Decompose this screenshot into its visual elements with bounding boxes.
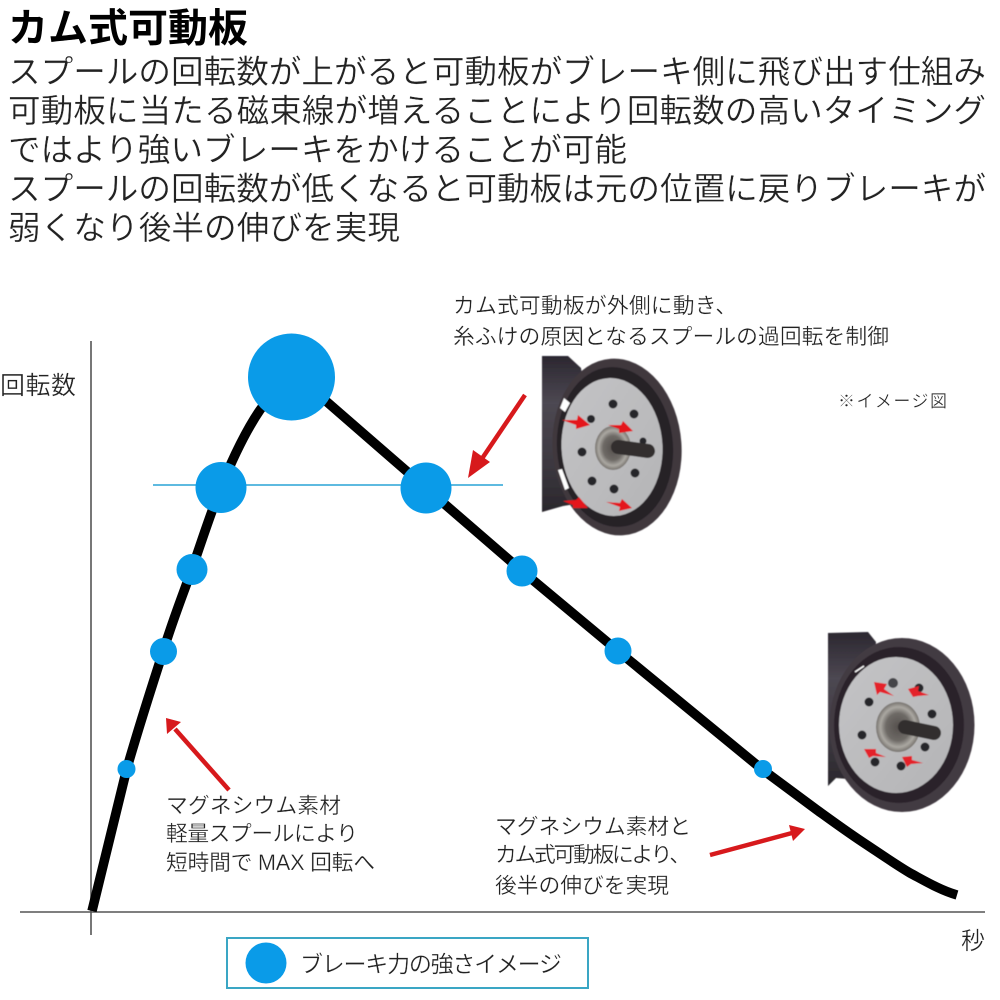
annotation: magnesium spool: 軽量スプールにより [166, 821, 358, 846]
spool photo: plate returned [828, 632, 974, 812]
annotation: magnesium and cam plate: カム式可動板により、 [495, 842, 691, 867]
x axis label: 秒 [961, 928, 985, 955]
threshold line [153, 484, 503, 486]
description text: 可動板に当たる磁束線が増えることにより回転数の高いタイミング [8, 92, 986, 129]
description text: スプールの回転数が上がると可動板がブレーキ側に飛び出す仕組み [8, 53, 986, 90]
y axis label: 回転数 [0, 372, 76, 400]
legend circle [246, 942, 286, 984]
chart axes [20, 341, 985, 935]
annotation: magnesium spool: 短時間で MAX 回転へ [166, 850, 375, 875]
brake strength circles [118, 334, 772, 778]
annotation: magnesium and cam plate [495, 814, 691, 898]
description text: ではより強いブレーキをかけることが可能 [8, 131, 627, 168]
legend label: ブレーキ力の強さイメージ [300, 951, 562, 977]
arrow: to spool image [468, 395, 525, 478]
description text [8, 53, 986, 246]
annotation: cam plate moves outward [453, 293, 889, 349]
annotation: magnesium spool [166, 793, 375, 875]
description text: 弱くなり後半の伸びを実現 [8, 209, 400, 246]
annotation: cam plate moves outward: 糸ふけの原因となるスプールの過回転を制御 [453, 324, 889, 349]
title: カム式可動板 [8, 7, 248, 51]
annotation: magnesium and cam plate: 後半の伸びを実現 [495, 873, 669, 898]
arrow: to rising curve [166, 718, 229, 790]
legend [227, 938, 588, 988]
image note: ※イメージ図 [838, 392, 947, 411]
annotation: magnesium and cam plate: マグネシウム素材と [495, 814, 691, 839]
arrow: to falling curve [710, 825, 805, 855]
annotation: magnesium spool: マグネシウム素材 [166, 793, 341, 818]
annotation: cam plate moves outward: カム式可動板が外側に動き、 [453, 293, 737, 318]
description text: スプールの回転数が低くなると可動板は元の位置に戻りブレーキが [8, 170, 986, 207]
spool photo: plate moved outward [542, 354, 688, 540]
rotation curve [92, 377, 957, 911]
